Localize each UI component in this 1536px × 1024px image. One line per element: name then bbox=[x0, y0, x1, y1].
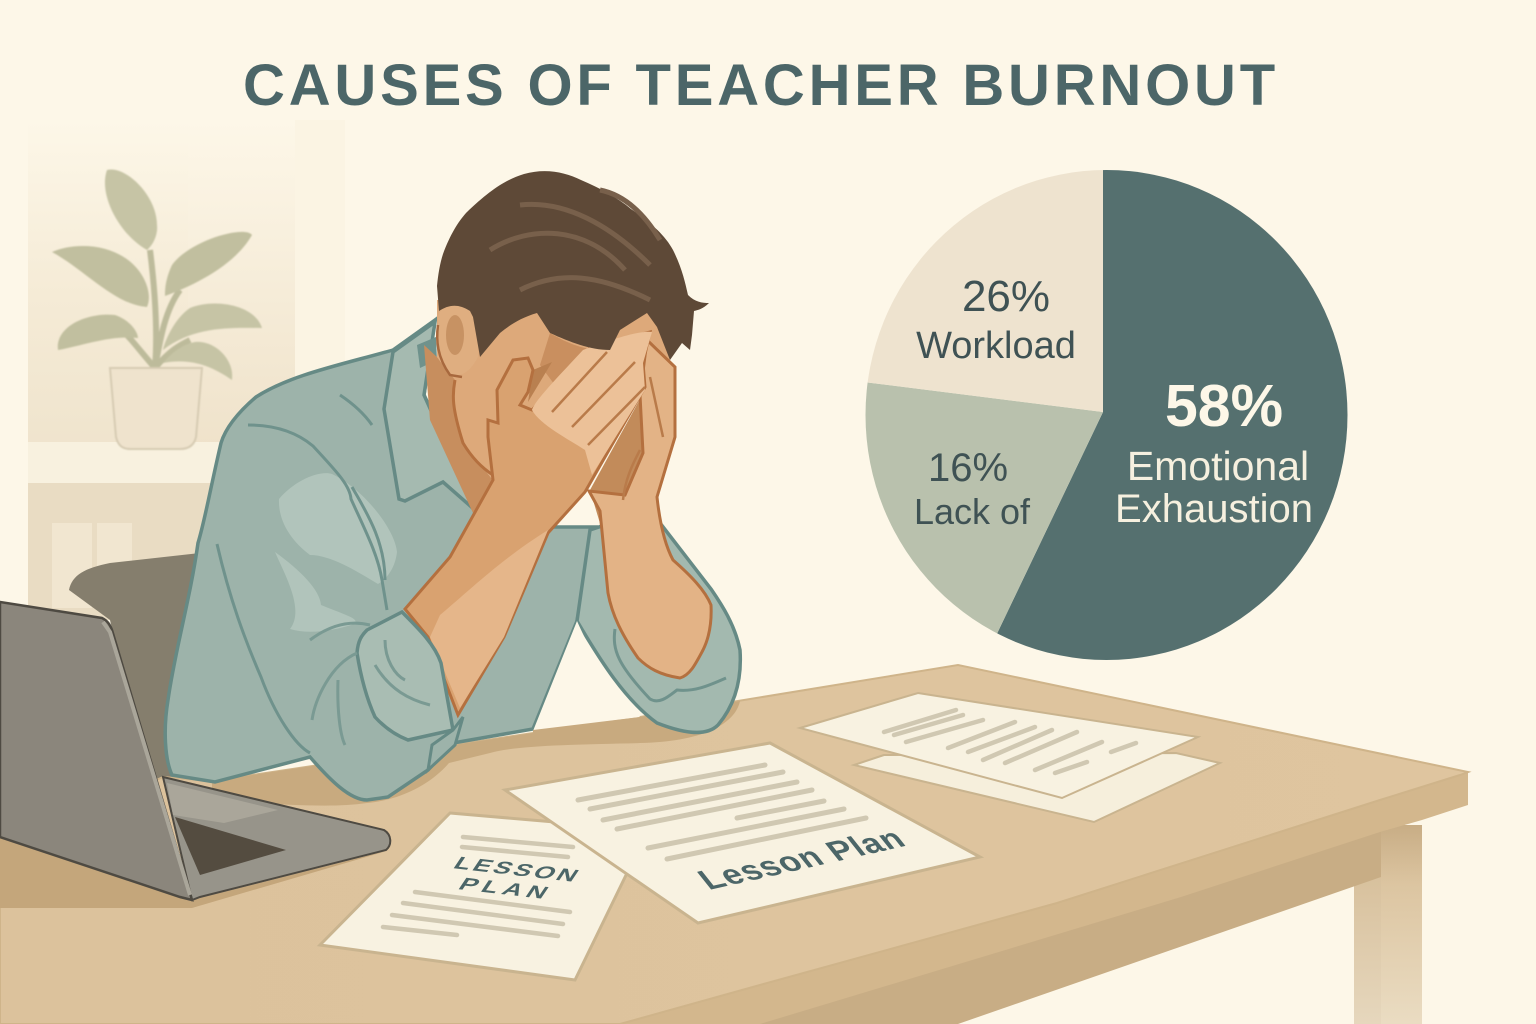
table apron bbox=[700, 825, 1381, 1024]
ear outline bbox=[437, 325, 462, 377]
shirt fold lines bbox=[217, 395, 387, 753]
left forearm and hand bbox=[405, 332, 650, 715]
pie chart bbox=[866, 170, 1348, 660]
label: workload: Workload bbox=[916, 325, 1076, 367]
lesson plan paper: large bbox=[505, 743, 980, 923]
laptop shadow bbox=[0, 837, 390, 908]
label: emotional: Emotional bbox=[1127, 443, 1309, 489]
ear inner bbox=[446, 315, 464, 355]
label: 58%: 58% bbox=[1165, 373, 1283, 439]
laptop screen back bbox=[0, 602, 192, 900]
right sleeve bbox=[577, 510, 740, 733]
fingers light bbox=[532, 332, 652, 475]
trackpad area bbox=[167, 783, 278, 823]
teacher bbox=[165, 171, 740, 800]
label: exhaustion: Exhaustion bbox=[1115, 487, 1313, 531]
shadow on table bbox=[212, 701, 740, 806]
laptop base bbox=[163, 777, 390, 900]
face gap shadow bbox=[528, 362, 552, 402]
neck bbox=[424, 345, 493, 513]
icon: potted plant bbox=[52, 169, 262, 449]
title: CAUSES OF TEACHER BURNOUT bbox=[243, 53, 1279, 118]
table top bbox=[0, 665, 1468, 1024]
label: lack of: Lack of bbox=[914, 491, 1031, 532]
collar inner band bbox=[417, 337, 437, 368]
face bbox=[437, 300, 670, 480]
collar bbox=[384, 322, 476, 511]
pie labels bbox=[914, 272, 1313, 532]
jaw line bbox=[453, 380, 493, 475]
stacked papers bbox=[800, 693, 1220, 822]
lesson plan paper: small: PLAN bbox=[455, 874, 558, 903]
lesson plan paper: small bbox=[320, 813, 648, 980]
finger lines bbox=[552, 352, 645, 445]
slice: lack of bbox=[866, 382, 1103, 634]
right palm shadow bbox=[590, 390, 645, 540]
bookshelf bbox=[28, 442, 228, 613]
forearm light bbox=[430, 530, 548, 708]
label: 26%: 26% bbox=[962, 272, 1050, 321]
laptop bbox=[0, 602, 390, 900]
hair bbox=[437, 171, 709, 360]
screen edge bbox=[103, 622, 190, 895]
top paper bbox=[800, 693, 1198, 798]
table slab edge bbox=[620, 772, 1468, 1024]
sleeve fold lines bbox=[310, 623, 430, 745]
table bbox=[0, 665, 1468, 1024]
background triangle bbox=[533, 621, 640, 731]
table leg bbox=[1354, 825, 1422, 1024]
label: 16%: 16% bbox=[928, 446, 1008, 490]
shirt highlight bbox=[275, 473, 397, 632]
rolled sleeve bbox=[357, 612, 453, 740]
brow shadow bbox=[540, 333, 612, 392]
wall shading and window bbox=[28, 120, 345, 620]
sleeve cuff tip bbox=[428, 717, 463, 770]
slice: workload bbox=[868, 170, 1103, 412]
right sleeve fold bbox=[614, 629, 726, 701]
shirt body bbox=[165, 320, 596, 800]
hair strands bbox=[490, 190, 660, 300]
right hand and forearm bbox=[589, 340, 711, 678]
lesson plan paper: small: LESSON bbox=[450, 853, 586, 886]
top paper lines bbox=[884, 710, 1136, 773]
keyboard bbox=[175, 817, 286, 875]
slice: emotional exhaustion bbox=[997, 170, 1348, 660]
ear bbox=[437, 299, 480, 375]
lesson plan paper: large: Lesson Plan bbox=[690, 822, 913, 895]
chair bbox=[69, 553, 210, 800]
right hand finger lines bbox=[623, 377, 663, 500]
lower paper bbox=[854, 753, 1220, 822]
table strip under triangle bbox=[533, 717, 640, 745]
